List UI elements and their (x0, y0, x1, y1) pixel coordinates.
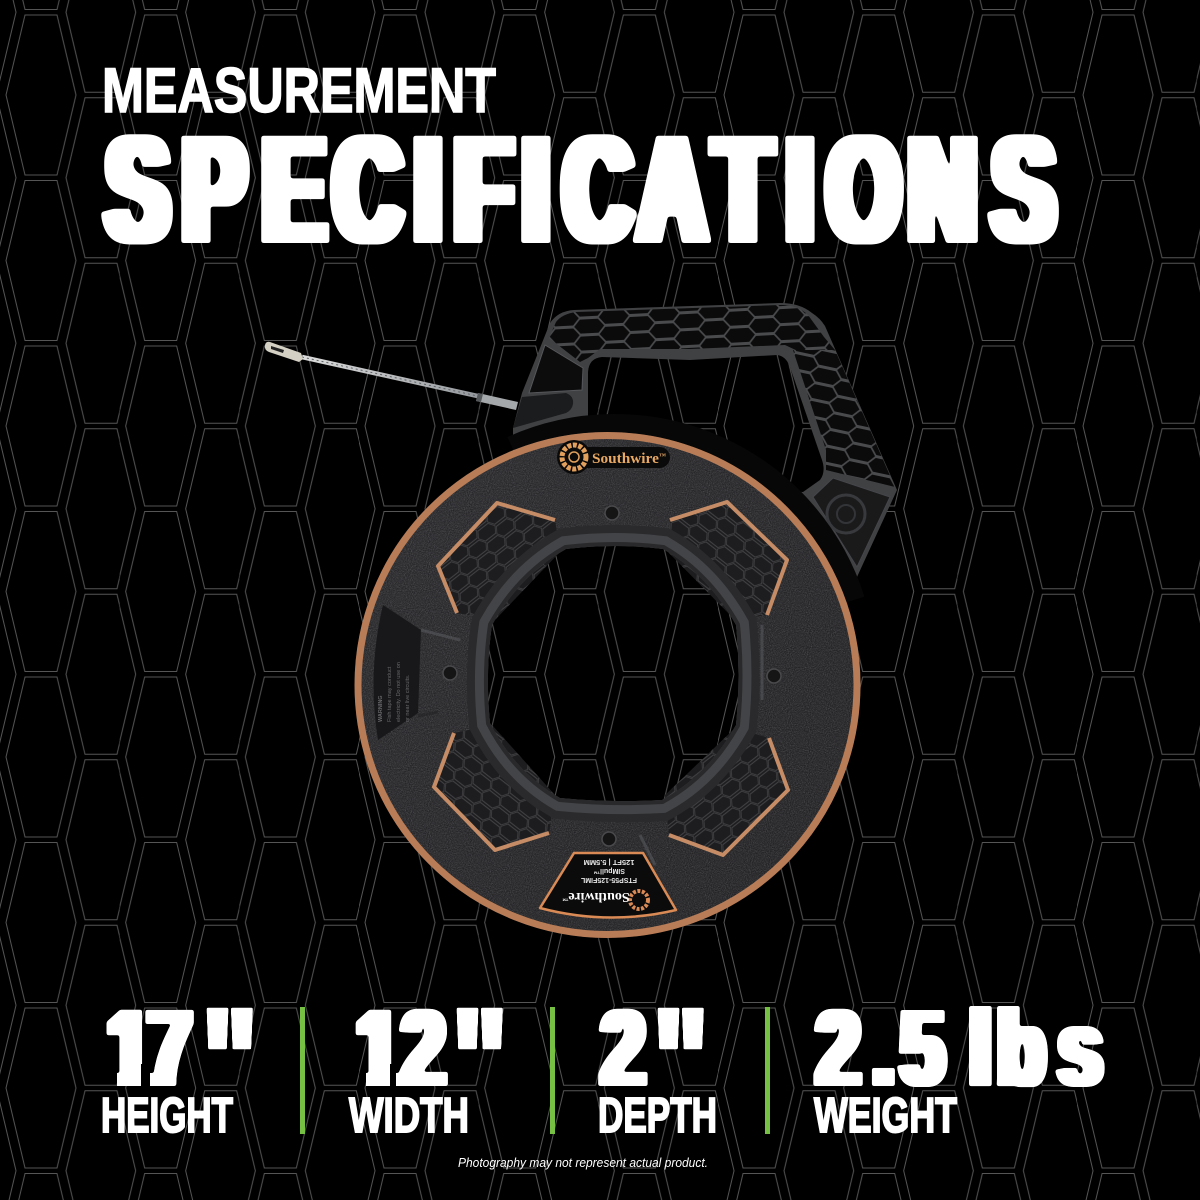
right honeycomb band (793, 350, 895, 487)
disc face (355, 432, 861, 938)
spec: height: 17 (107, 987, 191, 1108)
handle with honeycomb grip (513, 303, 897, 577)
spec: width: WIDTH (349, 1089, 469, 1143)
disclaimer: Photography may not represent actual product. (458, 1155, 708, 1170)
lower right pocket with embossed logo (813, 478, 890, 567)
bottom product label: ™ (562, 895, 568, 901)
spec: height: HEIGHT (101, 1089, 233, 1143)
spec: weight: 2.5 lbs (817, 987, 1102, 1108)
spec: depth: DEPTH (598, 1089, 717, 1143)
left warning label: Fish tape may conduct (387, 666, 393, 722)
left warning label (374, 605, 421, 740)
honeycomb window: bottom right (665, 728, 788, 855)
bottom product label: FTSP55-125FIML (580, 876, 637, 883)
bottom product label: SIMpull™ (593, 867, 625, 874)
upper left pocket (529, 345, 583, 393)
Southwire logo badge: ™ (659, 452, 666, 460)
left warning label: WARNING (378, 695, 384, 722)
spec: depth: 2 (602, 987, 645, 1108)
spec: height: " (202, 977, 257, 1145)
honeycomb window: bottom left (434, 725, 555, 850)
heading: specifications: SPECIFICATIONS (107, 106, 1055, 273)
spec: weight: WEIGHT (814, 1089, 957, 1143)
left warning label: or near live circuits. (405, 674, 411, 722)
product photo: fish tape reel (265, 303, 897, 938)
bottom product label: Southwire (568, 889, 630, 904)
divider (550, 1007, 555, 1134)
reel disc (355, 432, 861, 938)
spec: width (348, 1008, 503, 1133)
specifications row (102, 1006, 1105, 1134)
honeycomb window: top left (438, 503, 560, 620)
spec: height (102, 1008, 253, 1134)
hub ridges (418, 625, 762, 865)
bottom product label: 125FT | 5.5MM (584, 858, 634, 867)
spec: width: 12 (356, 987, 445, 1108)
copper rim (358, 436, 857, 934)
spec: depth: " (653, 977, 708, 1145)
divider (765, 1007, 770, 1134)
fish tape wire and tip (265, 342, 518, 410)
bottom product label (540, 853, 676, 918)
honeycomb window: top right (668, 502, 787, 620)
left warning label: electricity. Do not use on (396, 662, 402, 722)
screws (443, 506, 781, 846)
heading: measurement: MEASUREMENT (102, 56, 496, 126)
top honeycomb band (549, 305, 835, 362)
inner hub around opening (488, 546, 738, 801)
spec: depth (598, 977, 717, 1145)
Southwire logo badge: Southwire (592, 451, 658, 467)
reel back plate (512, 425, 854, 600)
divider (300, 1007, 305, 1134)
title (102, 56, 1055, 273)
Southwire logo badge (557, 440, 670, 474)
spec: width: " (452, 977, 507, 1145)
latch (513, 393, 573, 428)
